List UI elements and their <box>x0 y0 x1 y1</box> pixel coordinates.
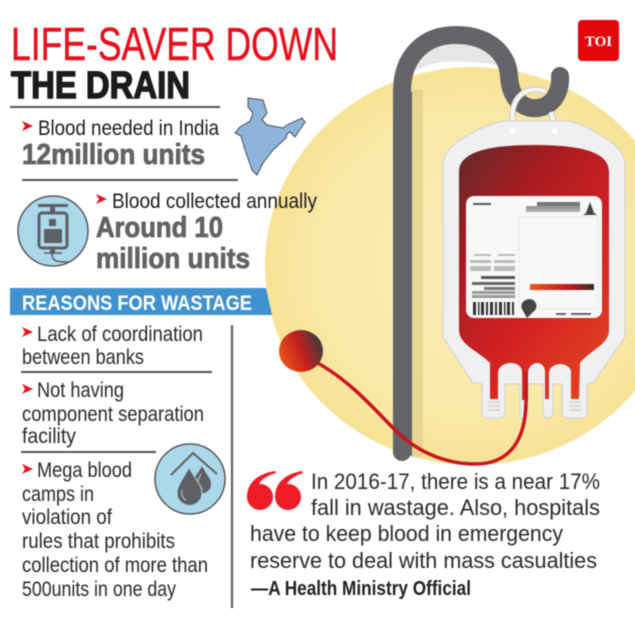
reasons list: facility <box>22 425 76 448</box>
reasons list: between banks <box>22 346 144 369</box>
reasons list: rules that prohibits <box>22 530 175 553</box>
title: THE DRAIN <box>11 65 190 107</box>
reasons list: Mega blood <box>37 459 132 482</box>
reasons list: component separation <box>22 403 204 426</box>
stat: blood collected: Around 10 <box>96 212 223 244</box>
icon: blood bag circle <box>18 196 88 266</box>
icon: India map <box>235 98 305 175</box>
quote text: reserve to deal with mass casualties <box>250 548 597 573</box>
stat: blood needed: 12million units <box>22 139 205 171</box>
reasons list: Lack of coordination <box>37 323 203 346</box>
quote text: In 2016-17, there is a near 17% <box>311 469 600 494</box>
reasons list: 500units in one day <box>22 578 176 601</box>
stat: blood collected <box>96 190 317 275</box>
ring holding bag <box>513 89 554 122</box>
blood bag <box>443 121 625 418</box>
heading: reasons for wastage: REASONS FOR WASTAGE <box>22 292 252 315</box>
reasons list: camps in <box>22 483 94 506</box>
blood fill <box>459 145 609 400</box>
stat: blood needed <box>22 117 219 171</box>
reasons list <box>21 323 212 601</box>
stat: blood collected: Blood collected annually <box>112 190 317 213</box>
title <box>11 18 338 107</box>
quote text: fall in wastage. Also, hospitals <box>311 495 600 520</box>
iv pole and hook <box>393 35 560 457</box>
quote text <box>250 469 600 600</box>
quote text: have to keep blood in emergency <box>250 521 563 546</box>
reasons list: collection of more than <box>22 554 208 577</box>
logo: TOI: TOI <box>585 34 612 50</box>
yellow background circle <box>265 67 635 465</box>
bag label <box>466 196 602 318</box>
logo: TOI <box>578 20 619 61</box>
tube and bulb <box>279 330 526 464</box>
quote marks <box>247 471 303 510</box>
tube caps <box>488 401 581 411</box>
icon: roof and blood drops <box>155 444 225 514</box>
reasons list: Not having <box>37 379 124 402</box>
quote text: —A Health Ministry Official <box>251 578 471 600</box>
reasons list: violation of <box>22 506 112 529</box>
title: LIFE-SAVER DOWN <box>11 18 338 70</box>
stat: blood needed: Blood needed in India <box>38 117 219 140</box>
stat: blood collected: million units <box>96 243 250 275</box>
